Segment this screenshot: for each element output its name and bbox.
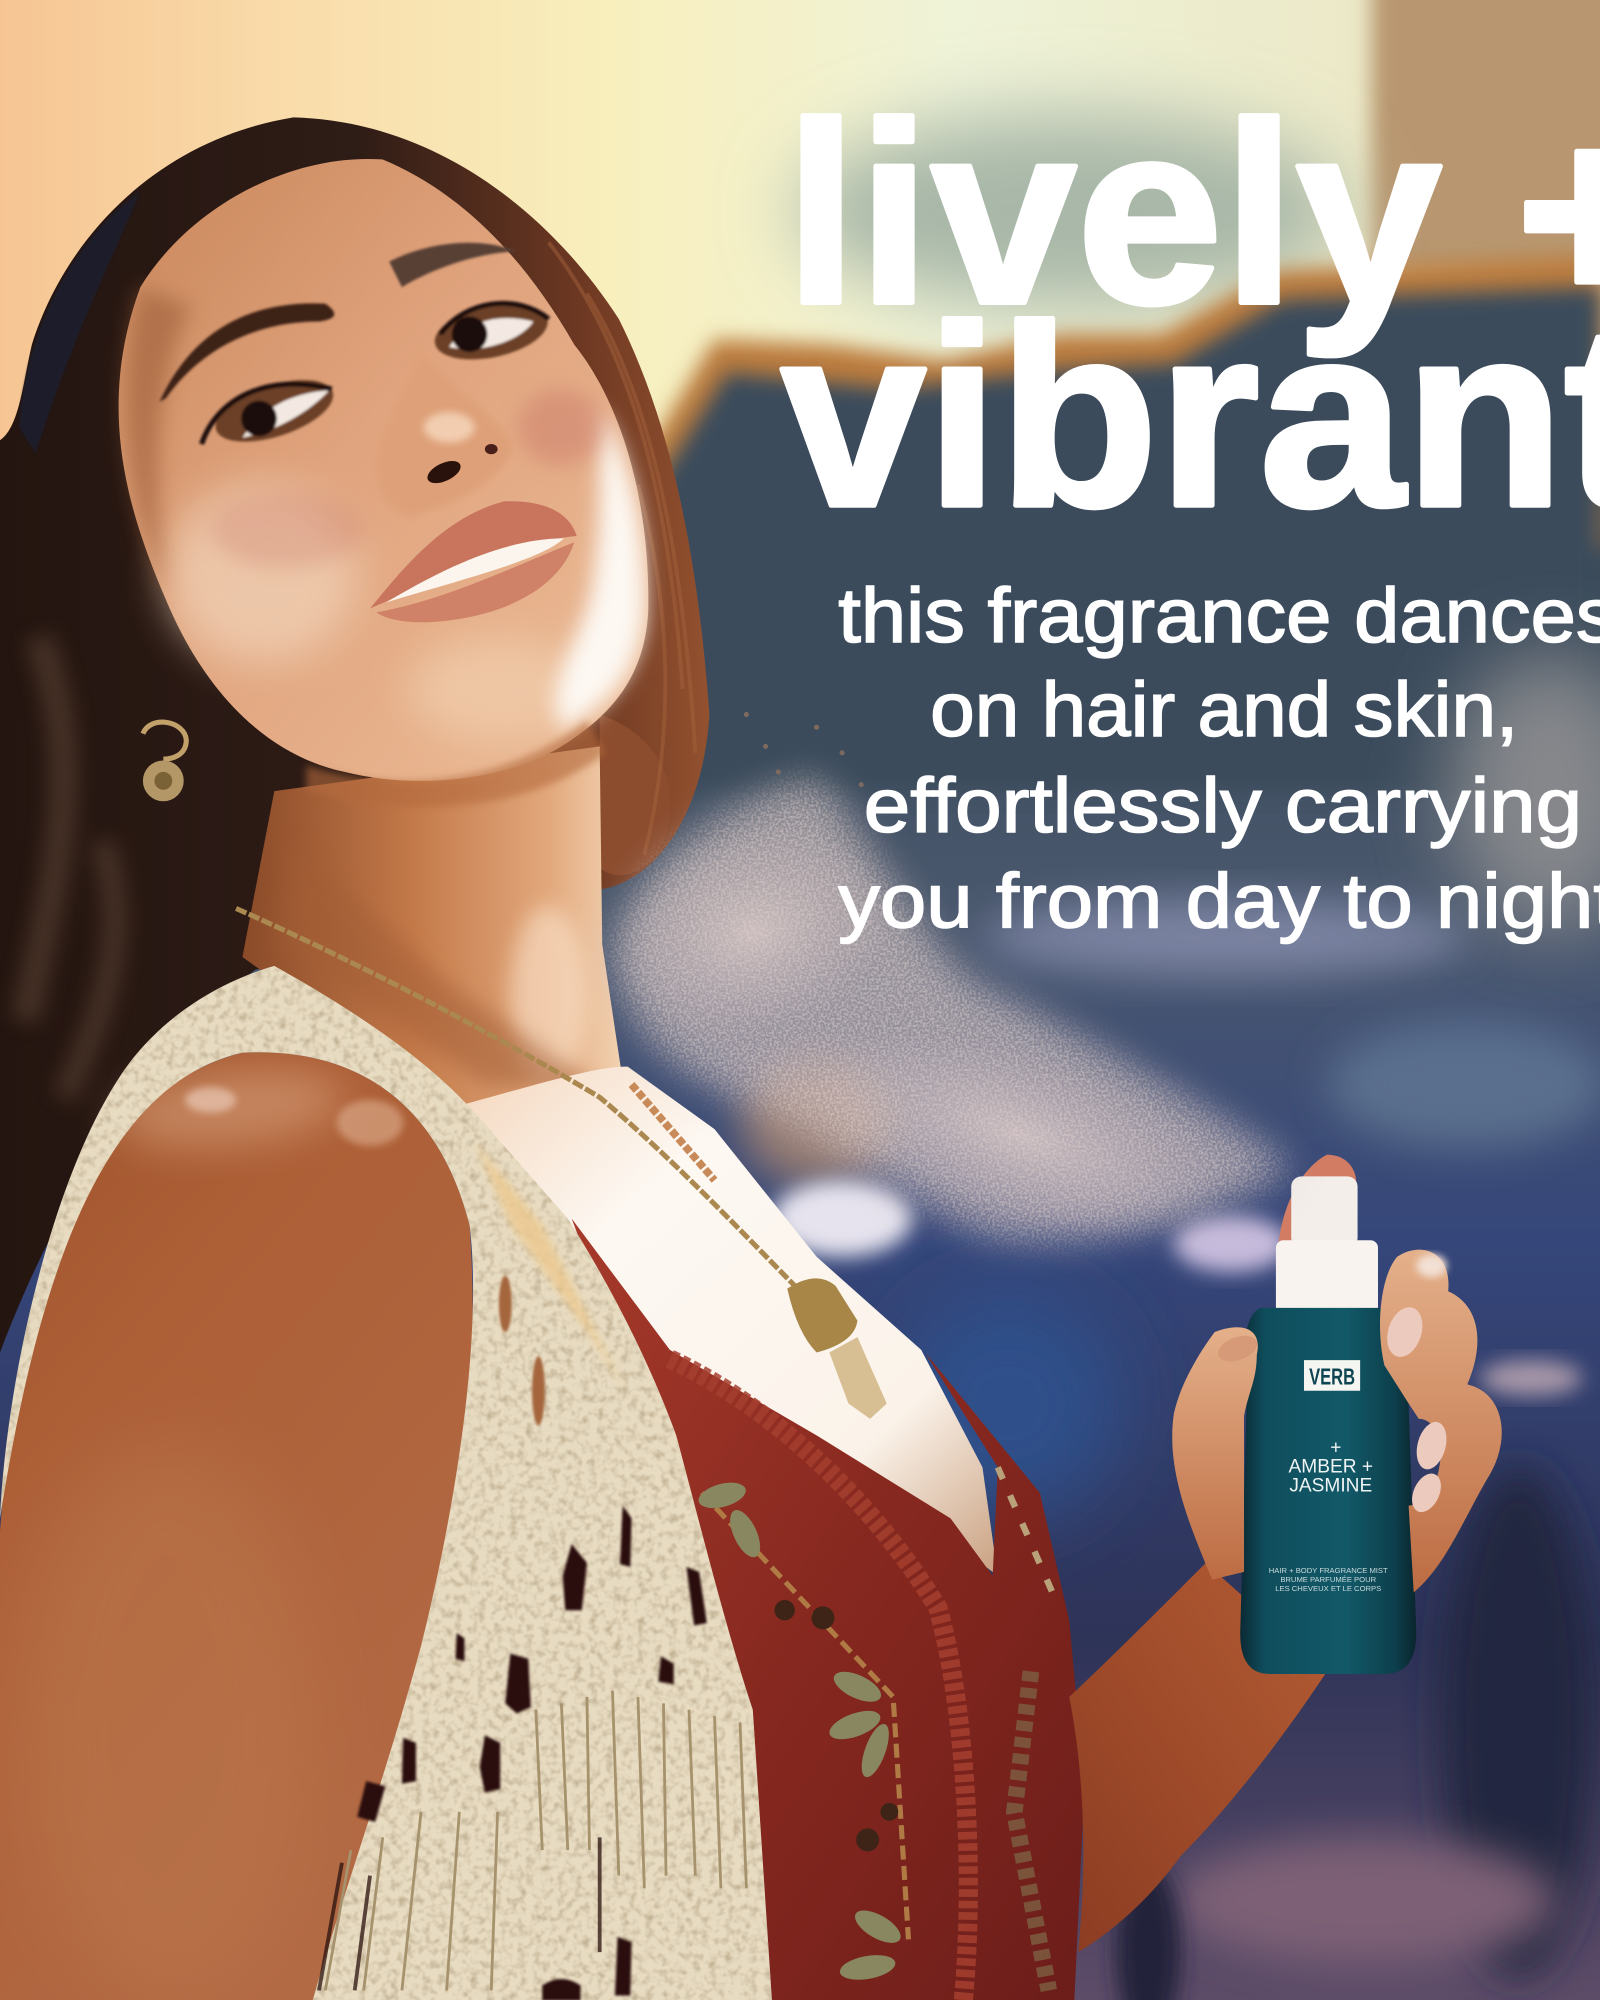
fragrance mist spray [591,712,1291,1281]
bottle label: small description: BRUME PARFUMÉE POUR [1280,1575,1377,1584]
nose [377,351,513,517]
body copy [838,574,1600,945]
body copy: you from day to night [838,860,1600,945]
eyebrows [159,243,517,402]
headline: lively [785,69,1443,359]
bottle label: small description: LES CHEVEUX ET LE CORPS [1275,1584,1381,1593]
gold necklace and pendant [236,908,887,1419]
bottle label: product name [1289,1437,1373,1497]
bottle label: VERB logo: VERB [1309,1363,1355,1389]
bottle label: product name: + [1330,1437,1341,1458]
red dress [572,1219,1085,2000]
crochet vest [0,966,772,2000]
bottle label: small description: HAIR + BODY FRAGRANCE MIST [1269,1566,1388,1575]
hair [0,117,709,1352]
bottle label: product name: AMBER + [1289,1456,1373,1477]
forearm [1069,1563,1327,1952]
bottle label: product name: JASMINE [1289,1476,1372,1497]
body copy: this fragrance dances [838,574,1600,659]
lips and teeth [370,501,577,622]
body copy: on hair and skin, [930,668,1518,753]
body copy: effortlessly carrying [864,764,1582,849]
left eye [202,368,340,454]
bottle label: VERB logo [1304,1360,1360,1391]
face [119,159,648,807]
bottle label: small description [1269,1566,1388,1593]
neck and chest [242,746,998,1576]
spray bottle [1240,1155,1416,1674]
headline [781,69,1600,560]
hand gripping bottle [1172,1250,1502,1592]
upper arm [0,1052,473,2000]
earring [143,722,186,801]
right eye [430,295,553,369]
